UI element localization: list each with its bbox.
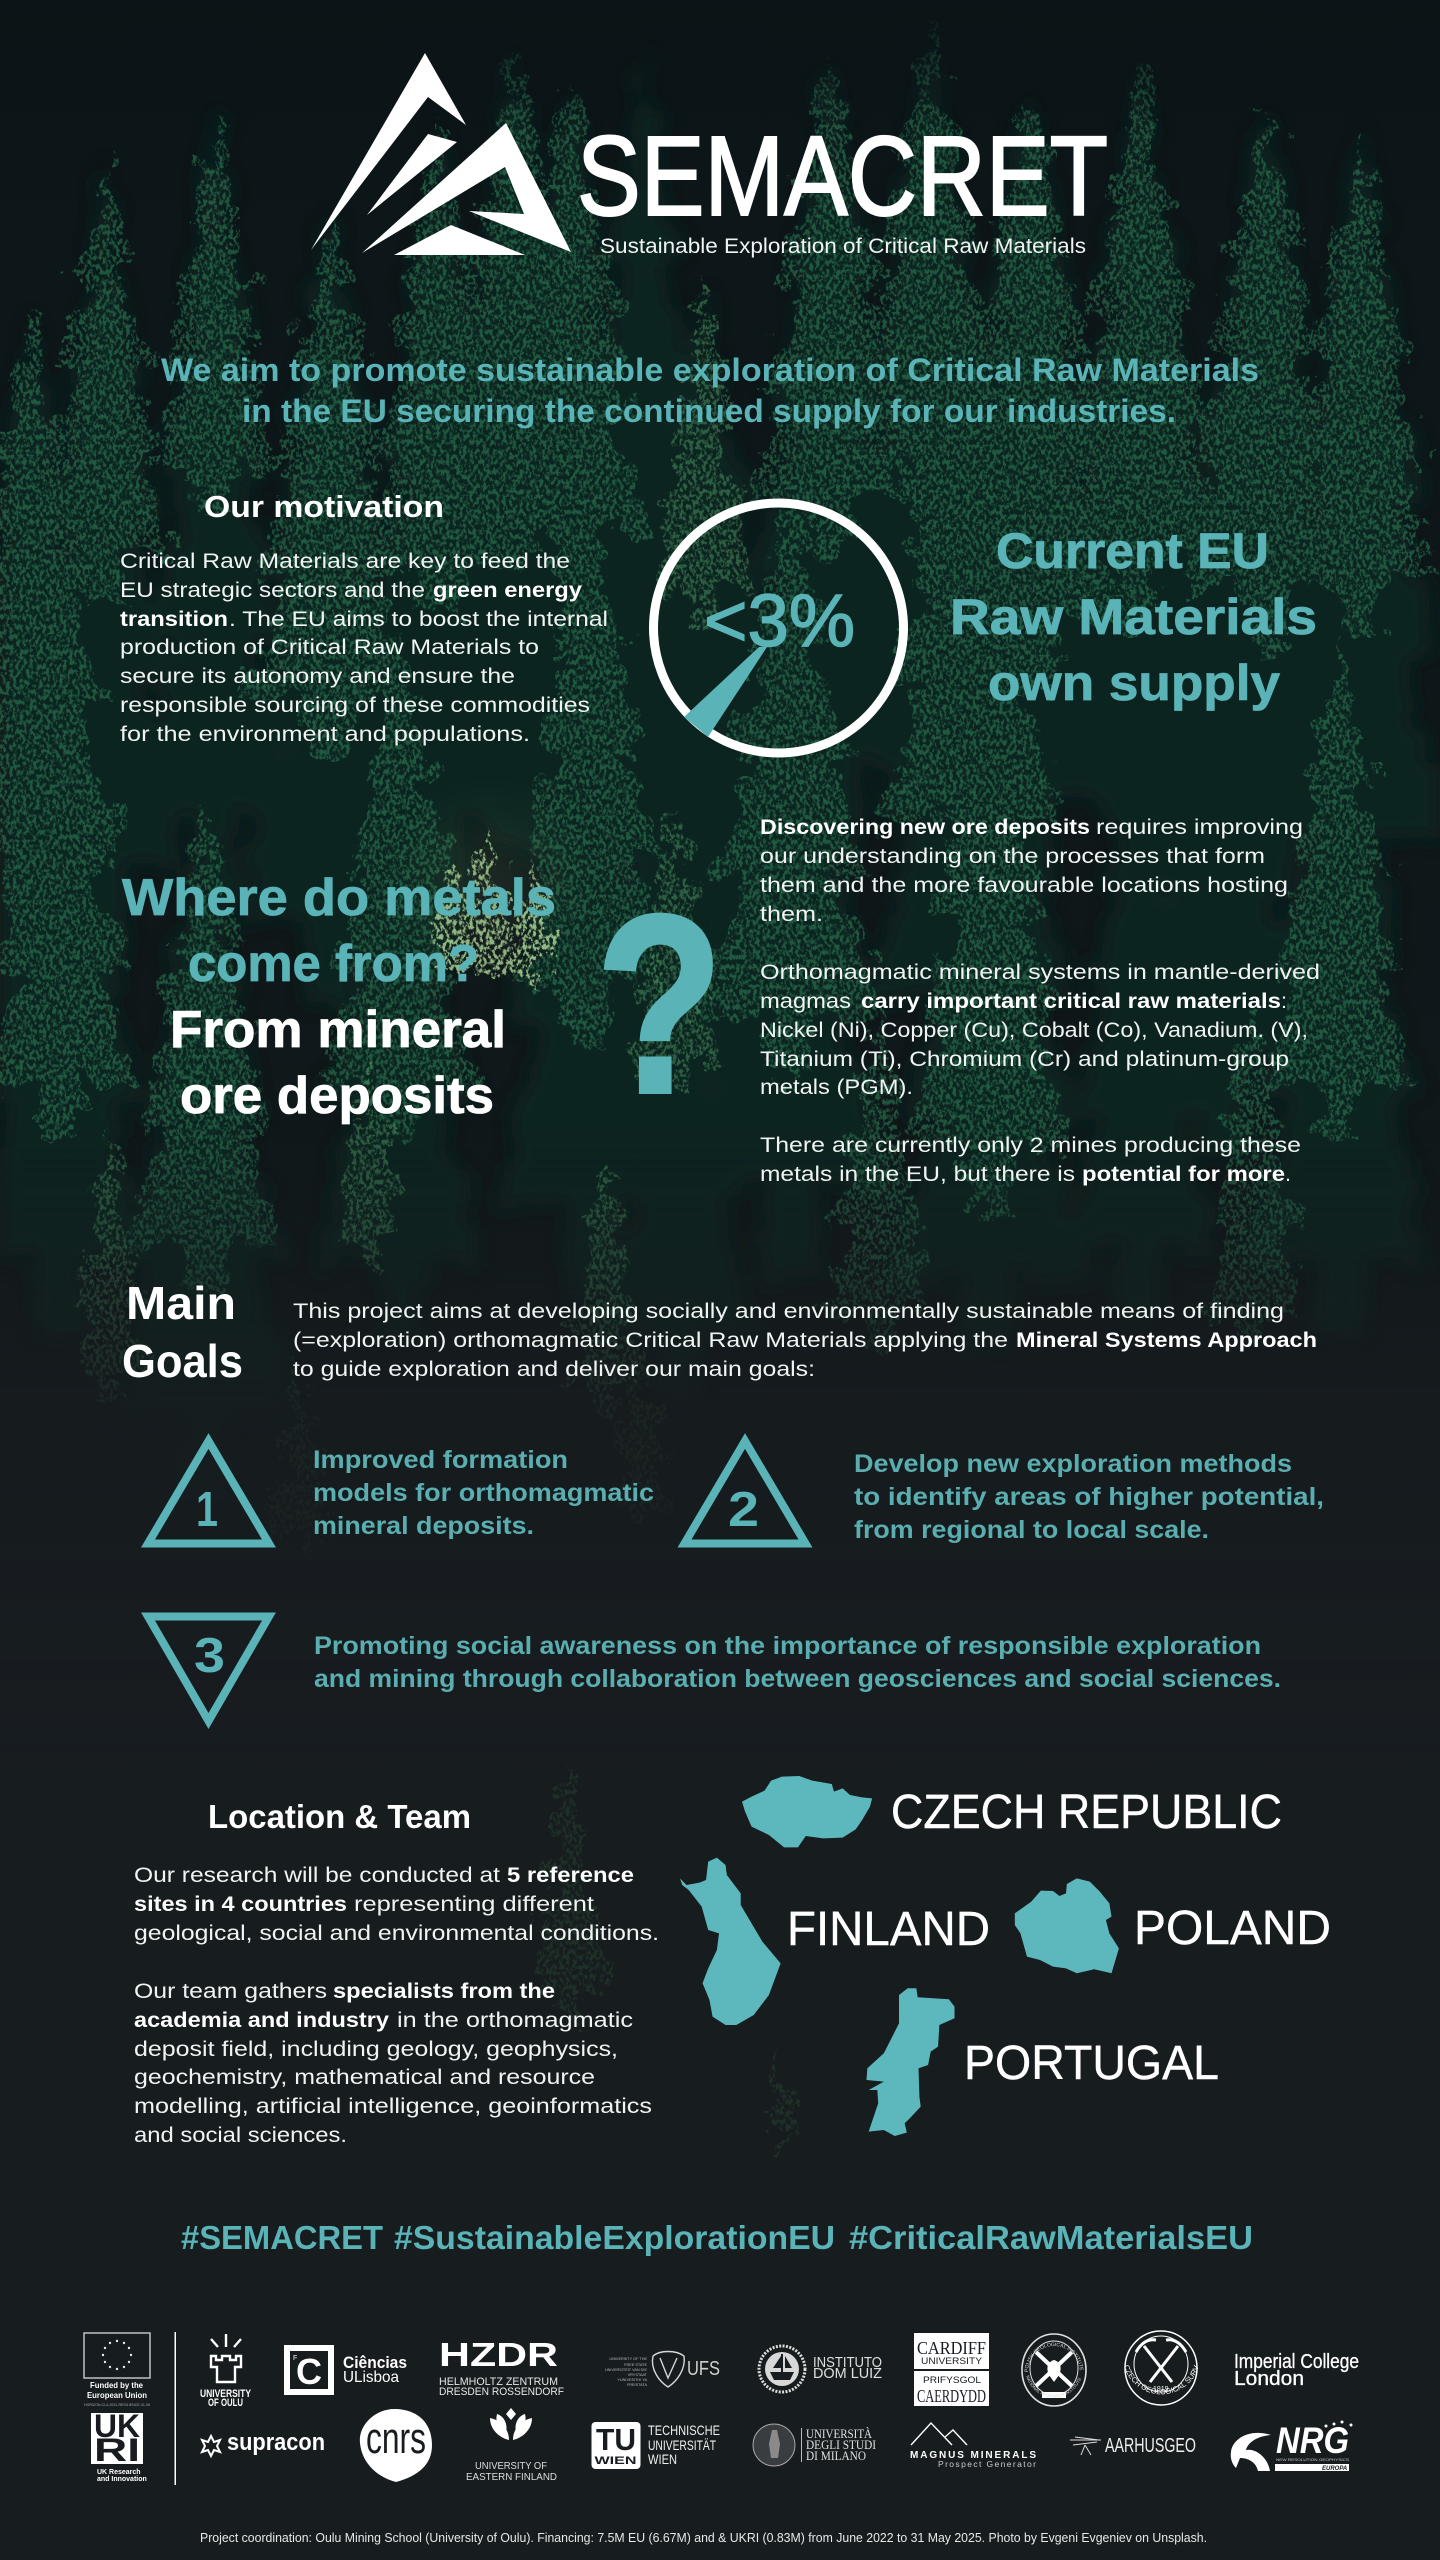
heading: main goals: Goals — [122, 1335, 243, 1387]
text block: ore deposits: magmas — [760, 989, 851, 1013]
logo: Cardiff University: CARDIFF — [917, 2338, 986, 2358]
logo: University of the Free State — [605, 2352, 720, 2387]
goal 3: inverted triangle icon — [148, 1616, 269, 1721]
logo: University of Oulu — [200, 2334, 252, 2409]
text block: ore deposits: metals (PGM). — [760, 1075, 913, 1099]
text block: motivation: EU strategic sectors and the — [120, 578, 425, 602]
heading: our motivation: Our motivation — [204, 489, 444, 524]
text block: location and team: Our team gathers — [134, 1979, 327, 2003]
logo: Czech Geological Survey: CZECH GEOLOGICAL SURVEY — [1126, 2364, 1198, 2394]
logo: Polish Geological Institute — [1021, 2333, 1087, 2407]
text block: location and team: deposit field, including geology, geophysics, — [134, 2037, 618, 2061]
text block: ore deposits: requires improving — [1096, 815, 1303, 839]
text block: ore deposits: metals in the EU, but there is — [760, 1162, 1075, 1186]
text block: location and team: and social sciences. — [134, 2123, 347, 2147]
label: Finland: FINLAND — [787, 1903, 990, 1956]
map: Czech Republic — [742, 1776, 872, 1847]
logo: TU Wien: WIEN — [648, 2451, 677, 2467]
goal 2: triangle icon — [684, 1441, 806, 1544]
callout: current EU supply: Raw Materials — [950, 589, 1317, 645]
logo: Aarhusgeo — [1070, 2435, 1196, 2457]
heading: main goals — [122, 1277, 243, 1387]
hashtags: #CriticalRawMaterialsEU — [849, 2219, 1253, 2256]
goal 3: text — [314, 1632, 1281, 1693]
logo: HZDR: HELMHOLTZ ZENTRUM — [439, 2376, 558, 2388]
logo: funded by the European Union: HORIZON-CL4-2021-RESILIENCE-01-06 — [84, 2403, 150, 2407]
logo: Ciencias ULisboa: F — [293, 2355, 297, 2362]
text block: motivation: production of Critical Raw Materials to — [120, 635, 539, 659]
goal 1: text: models for orthomagmatic — [313, 1479, 654, 1507]
logo: University of Oulu: UNIVERSITY — [200, 2388, 252, 2400]
logo: Supracon: supracon — [227, 2429, 325, 2456]
logo: University of the Free State: YUNIVESITHI YA — [617, 2378, 647, 2382]
logo: Ciencias ULisboa: Ciências — [343, 2353, 407, 2372]
footer credits: Project coordination: Oulu Mining School (University of Oulu). Financing: 7.5M EU (6.67M) and & UKRI (0.83M) from June 2022 to 31 May 2025. Photo by Evgeni Evgeniev on Unsplash. — [200, 2530, 1207, 2545]
logo: University of the Free State: UNIVERSITY OF THE — [609, 2357, 647, 2361]
goal 3: text: and mining through collaboration between geosciences and social sciences. — [314, 1665, 1281, 1693]
logo: Imperial College London — [1234, 2351, 1359, 2390]
text block: motivation: . The EU aims to boost the internal — [229, 607, 608, 631]
text block: ore deposits: Orthomagmatic mineral systems in mantle-derived — [760, 960, 1320, 984]
label: Czech Republic: CZECH REPUBLIC — [891, 1786, 1282, 1839]
goal 1: triangle icon — [148, 1441, 269, 1544]
logo: TU Wien — [592, 2422, 720, 2469]
callout: current EU supply: Current EU — [996, 523, 1269, 579]
logo: University of the Free State: FREISTATA — [627, 2383, 647, 2387]
text block: ore deposits: Titanium (Ti), Chromium (Cr) and platinum-group — [760, 1047, 1289, 1071]
text block: ore deposits — [760, 815, 1320, 1186]
logo: UK Research and Innovation: and Innovation — [97, 2476, 147, 2483]
text block: location and team: sites in 4 countries — [134, 1892, 347, 1916]
logo: SEMACRET wordmark: SEMACRET — [577, 113, 1108, 239]
logo: NRG Europa: EUROPA — [1322, 2466, 1347, 2472]
logo: HZDR — [439, 2336, 564, 2398]
logo: Instituto Dom Luiz: INSTITUTO — [813, 2354, 882, 2371]
goal 2: text: to identify areas of higher potential, — [854, 1483, 1324, 1511]
logo: Cardiff University: PRIFYSGOL — [923, 2375, 981, 2386]
text block: location and team: Our research will be conducted at — [134, 1863, 500, 1887]
pie chart: under 3 percent supply: <3% — [704, 579, 855, 662]
icon: question mark: ? — [596, 863, 723, 1147]
text block: project aim: (=exploration) orthomagmatic Critical Raw Materials applying the — [293, 1328, 1008, 1352]
goal 3: inverted triangle icon: 3 — [194, 1629, 225, 1683]
text block: motivation: transition — [120, 607, 228, 631]
logo: funded by the European Union — [84, 2333, 150, 2407]
label: Portugal: PORTUGAL — [964, 2037, 1219, 2090]
logo: TU Wien: WIEN — [594, 2455, 637, 2467]
logo: funded by the European Union: European Union — [87, 2390, 147, 2400]
heading: where do metals come from — [122, 869, 556, 1125]
logo: Ciencias ULisboa — [287, 2348, 407, 2392]
goal 2: text: Develop new exploration methods — [854, 1450, 1292, 1478]
logo: Polish Geological Institute: NATIONAL RESEARCH INSTITUTE — [1026, 2375, 1082, 2398]
logo: CNRS: cnrs — [366, 2414, 426, 2463]
map: Finland — [680, 1858, 781, 2025]
goal 1: text — [313, 1446, 654, 1540]
text block: motivation — [120, 549, 608, 746]
logo: Magnus Minerals: Prospect Generator — [938, 2459, 1036, 2469]
logo: Ciencias ULisboa: C — [296, 2351, 322, 2392]
logo: UK Research and Innovation: RI — [94, 2432, 140, 2468]
text block: ore deposits: them and the more favourable locations hosting — [760, 873, 1288, 897]
logo: UK Research and Innovation: UK Research — [97, 2469, 141, 2476]
logo: Instituto Dom Luiz: DOM LUIZ — [813, 2365, 882, 2382]
logo: Cardiff University: UNIVERSITY — [921, 2356, 983, 2367]
text block: location and team: representing different — [354, 1892, 594, 1916]
goal 1: triangle icon: 1 — [196, 1483, 218, 1537]
logo: Instituto Dom Luiz — [759, 2346, 882, 2392]
logo: Cardiff University — [914, 2333, 989, 2406]
text block: motivation: responsible sourcing of these commodities — [120, 693, 590, 717]
text block: location and team: geological, social and environmental conditions. — [134, 1921, 659, 1945]
logo: TU Wien: UNIVERSITÄT — [648, 2437, 716, 2453]
logo: University of Eastern Finland: EASTERN FINLAND — [466, 2471, 557, 2483]
text block: ore deposits: Nickel (Ni), Copper (Cu), Cobalt (Co), Vanadium. (V), — [760, 1018, 1308, 1042]
logo: NRG Europa: NEW RESOLUTION GEOPHYSICS — [1276, 2457, 1349, 2462]
heading: where do metals come from: From mineral — [170, 1001, 506, 1059]
heading: where do metals come from: ore deposits — [180, 1067, 494, 1125]
logo: Imperial College London: Imperial College — [1234, 2351, 1359, 2373]
text block: ore deposits: potential for more — [1082, 1162, 1285, 1186]
hashtags — [181, 2219, 1253, 2256]
logo: TU Wien: TU — [596, 2422, 636, 2457]
callout: current EU supply: own supply — [988, 655, 1280, 711]
text block: ore deposits: Discovering new ore deposits — [760, 815, 1090, 839]
logo: Universita degli Studi di Milano: DI MILANO — [806, 2448, 866, 2463]
callout: current EU supply — [950, 523, 1317, 711]
logo: University of Eastern Finland: UNIVERSITY OF — [475, 2460, 547, 2472]
text block: ore deposits: them. — [760, 902, 823, 926]
headline statement: in the EU securing the continued supply for our industries. — [242, 393, 1176, 429]
logo: Czech Geological Survey — [1124, 2330, 1198, 2406]
logo: University of the Free State: UNIVERSITEIT VAN DIE — [605, 2368, 647, 2372]
headline statement — [161, 352, 1259, 429]
goal 2: text — [854, 1450, 1324, 1544]
logo: University of the Free State: FREE STATE — [624, 2363, 647, 2367]
logo: Cardiff University: CAERDYDD — [917, 2386, 986, 2406]
text block: project aim: Mineral Systems Approach — [1016, 1328, 1317, 1352]
text block: location and team: specialists from the — [333, 1979, 555, 2003]
headline statement: We aim to promote sustainable exploration of Critical Raw Materials — [161, 352, 1259, 388]
logo: NRG Europa: NRG — [1276, 2420, 1349, 2461]
logo: Polish Geological Institute: POLISH GEOLOGICAL INSTITUTE — [1024, 2342, 1084, 2372]
logo: University of the Free State: VRYSTAAT — [628, 2373, 648, 2377]
label: Poland: POLAND — [1134, 1902, 1331, 1955]
goal 1: text: Improved formation — [313, 1446, 568, 1474]
heading: where do metals come from: come from? — [188, 935, 479, 993]
text block: project aim: to guide exploration and deliver our main goals: — [293, 1357, 815, 1381]
funders divider — [174, 2332, 176, 2485]
logo: University of the Free State: UFS — [687, 2358, 720, 2380]
heading: main goals: Main — [126, 1277, 236, 1329]
logo: Universita degli Studi di Milano: UNIVERSITÀ — [806, 2426, 873, 2441]
logo tagline: Sustainable Exploration of Critical Raw Materials — [600, 235, 1086, 258]
text block: location and team: geochemistry, mathematical and resource — [134, 2065, 595, 2089]
text block: ore deposits: carry important critical raw materials — [861, 989, 1281, 1013]
map: Poland — [1015, 1878, 1119, 1973]
logo: UK Research and Innovation: UK — [94, 2408, 140, 2444]
text block: location and team: in the orthomagmatic — [397, 2008, 633, 2032]
text block: motivation: secure its autonomy and ensure the — [120, 664, 515, 688]
logo: Aarhusgeo: AARHUSGEO — [1105, 2435, 1196, 2457]
text block: project aim: This project aims at developing socially and environmentally sustainable means of finding — [293, 1299, 1284, 1323]
text block: project aim — [293, 1299, 1317, 1381]
text block: location and team — [134, 1863, 659, 2147]
text block: ore deposits: . — [1285, 1162, 1291, 1186]
map: Portugal — [866, 1988, 955, 2136]
text block: location and team: 5 reference — [507, 1863, 634, 1887]
logo: Universita degli Studi di Milano — [753, 2424, 876, 2466]
heading: where do metals come from: Where do metals — [122, 869, 556, 927]
logo: SEMACRET mountain mark — [311, 53, 571, 255]
goal 3: text: Promoting social awareness on the importance of responsible exploration — [314, 1632, 1261, 1660]
text block: motivation: green energy — [433, 578, 582, 602]
logo: Ciencias ULisboa: ULisboa — [343, 2369, 399, 2386]
logo: HZDR: DRESDEN ROSSENDORF — [439, 2386, 564, 2398]
text block: location and team: academia and industry — [134, 2008, 389, 2032]
pie chart: under 3 percent supply — [654, 503, 904, 753]
logo: Magnus Minerals: MAGNUS MINERALS — [910, 2450, 1036, 2461]
logo: UK Research and Innovation — [91, 2408, 147, 2483]
logo: NRG Europa — [1231, 2420, 1352, 2472]
logo: Imperial College London: London — [1234, 2368, 1304, 2390]
logo: Czech Geological Survey: 1919 — [1153, 2386, 1169, 2393]
text block: ore deposits: : — [1281, 989, 1287, 1013]
logo: Magnus Minerals — [910, 2423, 1036, 2469]
logo: TU Wien: TECHNISCHE — [648, 2422, 720, 2438]
text block: location and team: modelling, artificial intelligence, geoinformatics — [134, 2094, 652, 2118]
text block: ore deposits: There are currently only 2 mines producing these — [760, 1133, 1301, 1157]
hashtags: #SEMACRET — [181, 2219, 383, 2256]
text block: motivation: for the environment and populations. — [120, 722, 530, 746]
logo: CNRS — [360, 2409, 432, 2482]
hashtags: #SustainableExplorationEU — [394, 2219, 835, 2256]
goal 2: text: from regional to local scale. — [854, 1516, 1209, 1544]
heading: location and team: Location & Team — [208, 1798, 471, 1835]
logo: Universita degli Studi di Milano: DEGLI STUDI — [806, 2437, 876, 2452]
logo: funded by the European Union: Funded by the — [90, 2380, 143, 2390]
goal 1: text: mineral deposits. — [313, 1512, 534, 1540]
text block: ore deposits: our understanding on the processes that form — [760, 844, 1265, 868]
text block: motivation: Critical Raw Materials are key to feed the — [120, 549, 570, 573]
logo: University of Oulu: OF OULU — [208, 2397, 243, 2409]
logo: University of Eastern Finland — [466, 2408, 557, 2483]
logo: HZDR: HZDR — [439, 2336, 558, 2373]
goal 2: triangle icon: 2 — [728, 1483, 759, 1537]
